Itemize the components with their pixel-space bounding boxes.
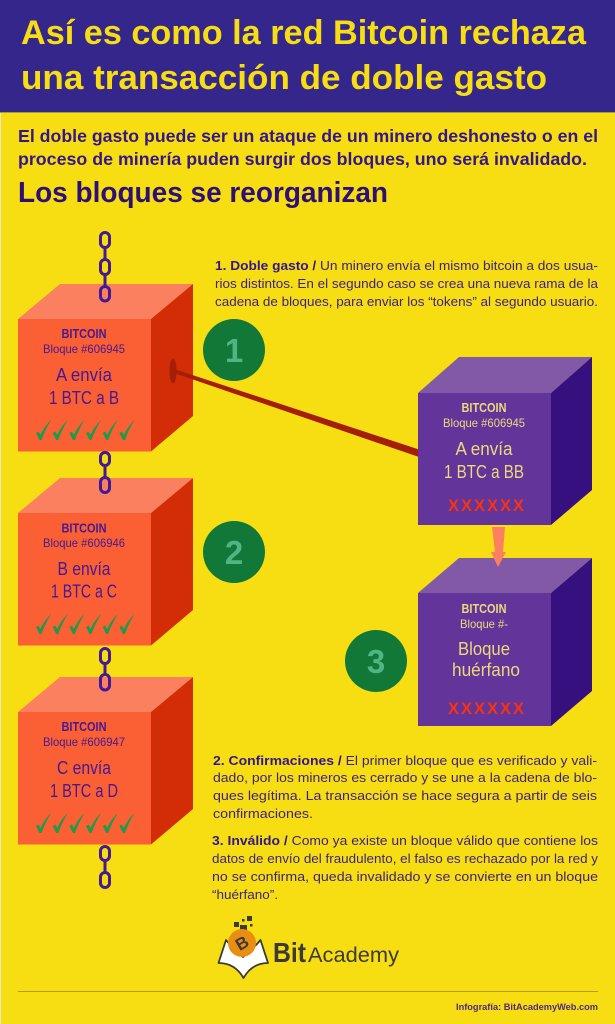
red block 1: BITCOIN xyxy=(62,327,106,341)
intro text: proceso de minería puden surgir dos bloques, uno será invalidado. xyxy=(18,149,587,169)
red block 2: Bloque #606946 xyxy=(43,536,125,550)
red block 1: Bloque #606945 xyxy=(43,342,125,356)
title banner xyxy=(0,0,615,113)
nail linking block 1 to fork block xyxy=(170,358,419,457)
red block 1: 1 BTC a B xyxy=(49,387,119,408)
intro text xyxy=(18,126,598,169)
purple orphan block xyxy=(418,558,592,726)
step 3 text: “huérfano”. xyxy=(212,887,278,902)
icon: book with coin xyxy=(218,916,268,978)
red block 3 xyxy=(18,677,193,844)
checkmarks xyxy=(36,813,134,833)
purple orphan block: Bloque #- xyxy=(460,617,508,631)
step 3 text: datos de envío del fraudulento, el falso es rechazado por la red y xyxy=(212,851,599,866)
purple fork block: 1 BTC a BB xyxy=(444,461,524,482)
red block 3: C envía xyxy=(57,757,112,778)
footer credit: Infografía: BitAcademyWeb.com xyxy=(456,1002,598,1012)
number badge 2 xyxy=(203,521,265,583)
number badge 3: 3 xyxy=(367,643,385,680)
red block 2: BITCOIN xyxy=(62,522,106,536)
step 1 text: 1. Doble gasto / Un minero envía el mismo bitcoin a dos usua- xyxy=(215,258,598,273)
purple fork block: Bloque #606945 xyxy=(443,416,525,430)
number badge 1 xyxy=(203,319,265,381)
section heading: Los bloques se reorganizan xyxy=(18,177,388,209)
step 2 text: ques legítima. La transacción se hace segura a partir de seis xyxy=(213,788,598,803)
arrow between purple blocks xyxy=(491,527,506,567)
number badge 1: 1 xyxy=(225,332,243,369)
step 1 text: cadena de bloques, para enviar los “tokens” al segundo usuario. xyxy=(215,294,598,309)
step 1 text: rios distintos. En el segundo caso se crea una nueva rama de la xyxy=(215,276,599,291)
red block 3: 1 BTC a D xyxy=(50,780,118,801)
checkmarks xyxy=(36,614,134,634)
chain links xyxy=(100,232,110,888)
purple orphan block: Bloque xyxy=(458,638,510,659)
red block 2: B envía xyxy=(58,558,111,579)
red block 3: Bloque #606947 xyxy=(43,735,125,749)
step 1 text xyxy=(215,258,599,309)
number badge 3 xyxy=(345,630,407,692)
red block 3: BITCOIN xyxy=(62,720,106,734)
icon: book with coin: B xyxy=(232,932,252,955)
step 2 text: 2. Confirmaciones / El primer bloque que es verificado y vali- xyxy=(213,753,597,768)
red block 1 xyxy=(18,284,193,452)
red block 2 xyxy=(18,478,193,646)
red block 2: 1 BTC a C xyxy=(51,580,117,602)
step 3 text: no se confirma, queda invalidado y se convierte en un bloque xyxy=(212,869,598,884)
footer rule xyxy=(18,991,598,992)
step 2 text xyxy=(213,753,598,821)
step 2 text: dado, por los mineros es cerrado y se une a la cadena de blo- xyxy=(213,770,597,785)
purple fork block: BITCOIN xyxy=(462,401,506,415)
title banner: Así es como la red Bitcoin rechaza xyxy=(21,14,587,52)
checkmarks xyxy=(36,420,134,440)
step 3 text: 3. Inválido / Como ya existe un bloque válido que contiene los xyxy=(212,833,599,848)
rejection marks: XXXXXX xyxy=(448,700,524,718)
purple orphan block: BITCOIN xyxy=(462,602,506,616)
purple fork block xyxy=(418,357,592,525)
BitAcademy logo: Bit xyxy=(273,937,306,968)
rejection marks: XXXXXX xyxy=(448,497,524,515)
intro text: El doble gasto puede ser un ataque de un minero deshonesto o en el xyxy=(18,126,598,146)
number badge 2: 2 xyxy=(225,534,243,571)
BitAcademy logo xyxy=(218,916,400,978)
step 3 text xyxy=(212,833,599,902)
BitAcademy logo: Academy xyxy=(308,944,400,967)
purple orphan block: huérfano xyxy=(452,659,520,680)
red block 1: A envía xyxy=(56,364,113,385)
purple fork block: A envía xyxy=(456,438,513,459)
step 2 text: confirmaciones. xyxy=(213,806,313,821)
title banner: una transacción de doble gasto xyxy=(21,59,547,97)
